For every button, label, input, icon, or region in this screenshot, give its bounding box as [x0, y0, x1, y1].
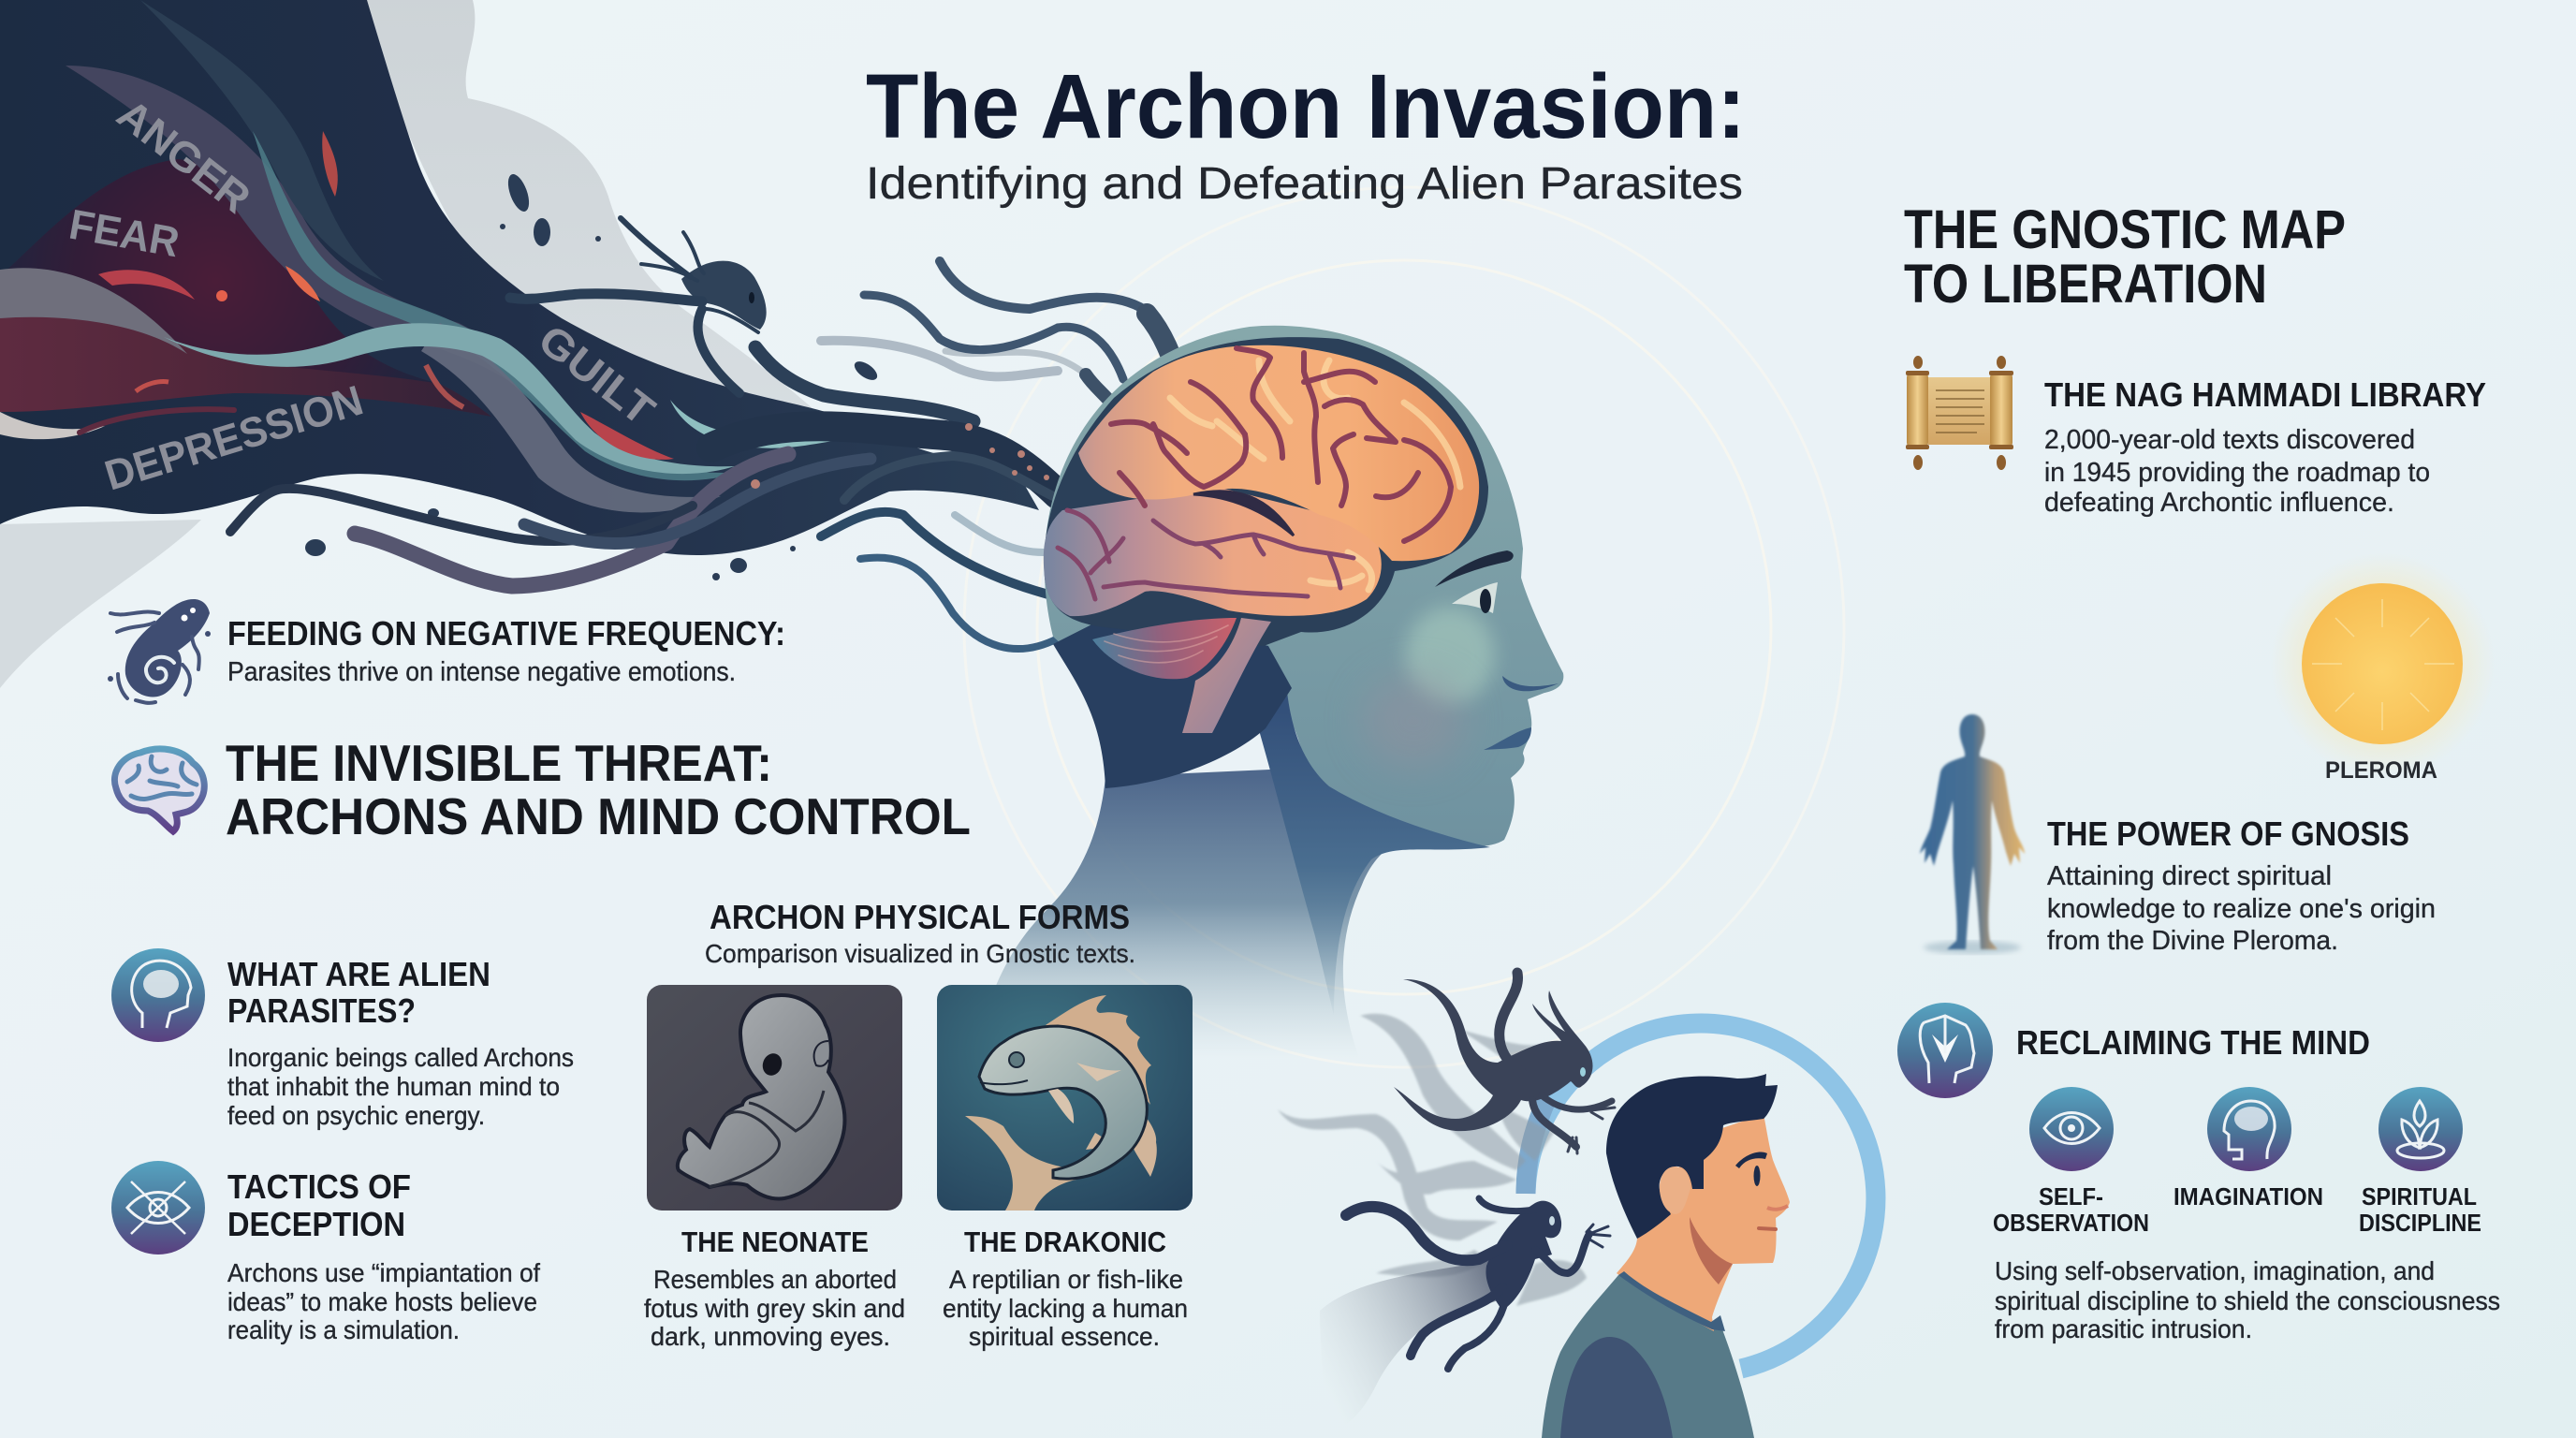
- slate band through anger: [66, 66, 538, 403]
- icon: feeding creature: [108, 599, 211, 703]
- jaw and neck shadow: [1259, 669, 1490, 1016]
- cheek tint: [1405, 607, 1495, 704]
- icon: head with arrow: [1897, 1003, 1993, 1098]
- item: self-observation: [1993, 1087, 2149, 1237]
- block: what are alien parasites: feed on psychic energy.: [227, 1101, 485, 1130]
- block: tactics of deception: ideas” to make hosts believe: [227, 1287, 537, 1316]
- label: the drakonic: entity lacking a human: [943, 1294, 1188, 1323]
- block: tactics of deception: reality is a simulation.: [227, 1315, 460, 1344]
- man hair: [1606, 1074, 1778, 1239]
- man sleeve: [1560, 1337, 1673, 1438]
- subtitle: Identifying and Defeating Alien Parasites: [866, 159, 1743, 209]
- brain: [1044, 345, 1479, 733]
- item: imagination: [2174, 1087, 2323, 1211]
- block: the nag hammadi library: [1906, 356, 2486, 518]
- grey veil upper: [360, 0, 842, 440]
- teal ribbon three: [670, 400, 932, 448]
- skull rim: [1044, 337, 1488, 646]
- head silhouette: [1045, 326, 1563, 846]
- emotion label: depression: DEPRESSION: [99, 375, 368, 500]
- illustration: head profile with brain: [973, 326, 1563, 1077]
- pale sliver: [0, 412, 105, 439]
- heading: the invisible threat: THE INVISIBLE THREAT:: [226, 734, 772, 792]
- subheading: Comparison visualized in Gnostic texts.: [705, 939, 1135, 968]
- ring lower-left fade: [1526, 1100, 1546, 1194]
- man facial features: [1735, 1152, 1788, 1229]
- lower archon: [1346, 1198, 1610, 1369]
- label: the neonate: dark, unmoving eyes.: [651, 1322, 890, 1351]
- item: self-observation: SELF-: [2039, 1182, 2103, 1211]
- item: self-observation: OBSERVATION: [1993, 1209, 2149, 1237]
- man collar: [1618, 1271, 1725, 1331]
- upper archon: [1394, 973, 1615, 1153]
- card: neonate image: [647, 985, 902, 1211]
- heading: the gnostic map to liberation: TO LIBERATION: [1904, 254, 2267, 315]
- icon: pleroma sun: [2270, 551, 2495, 784]
- panel: archon physical forms: [644, 898, 1193, 1351]
- eyebrow: [1435, 550, 1514, 587]
- description: Attaining direct spiritual: [2047, 861, 2332, 891]
- heading: THE NAG HAMMADI LIBRARY: [2044, 375, 2486, 414]
- block: what are alien parasites: [111, 948, 574, 1130]
- title: [866, 55, 1746, 209]
- item: spiritual discipline: [2359, 1087, 2481, 1237]
- heading: the invisible threat: ARCHONS AND MIND CONTROL: [226, 787, 971, 845]
- label: the neonate: [644, 1225, 905, 1351]
- description: 2,000-year-old texts discovered: [2044, 425, 2415, 455]
- heading: RECLAIMING THE MIND: [2016, 1023, 2370, 1062]
- label: pleroma: PLEROMA: [2325, 757, 2437, 784]
- icon: scroll: [1906, 356, 2013, 470]
- temporal sulci: [1058, 510, 1354, 599]
- label: the drakonic: [943, 1225, 1188, 1351]
- block: reclaiming the mind: spiritual discipline to shield the consciousness: [1995, 1286, 2500, 1315]
- block: the nag hammadi library: defeating Archontic influence.: [2044, 488, 2394, 518]
- item: spiritual discipline: SPIRITUAL: [2362, 1182, 2477, 1211]
- main dark body: [0, 0, 1039, 555]
- block: what are alien parasites: that inhabit the human mind to: [227, 1072, 560, 1101]
- maroon core: [0, 159, 440, 384]
- icon: crossed eye: [111, 1161, 205, 1255]
- block: what are alien parasites: PARASITES?: [227, 991, 416, 1030]
- emotion label: guilt: GUILT: [530, 315, 664, 434]
- neck and shoulders: [973, 768, 1404, 1077]
- lips: [1484, 727, 1531, 750]
- brain highlights: [1170, 360, 1460, 590]
- ink blobs: [305, 171, 880, 580]
- grey wisps: [1278, 1014, 1587, 1306]
- label: the drakonic: spiritual essence.: [969, 1322, 1160, 1351]
- heading: the invisible threat: [226, 734, 971, 845]
- teal ribbon two: [164, 323, 735, 474]
- mass creature: [510, 218, 767, 393]
- man ear: [1660, 1167, 1690, 1214]
- heading: the gnostic map to liberation: THE GNOSTIC MAP: [1904, 199, 2346, 260]
- tendrils to the brain: [230, 261, 1292, 649]
- block: the power of gnosis: [1920, 714, 2436, 956]
- text: feeding on negative frequency: [227, 614, 785, 687]
- description: Inorganic beings called Archons: [227, 1043, 574, 1072]
- block: reclaiming the mind: [1897, 1003, 2500, 1343]
- heading: THE POWER OF GNOSIS: [2047, 814, 2409, 853]
- thin maroon streak: [80, 409, 234, 433]
- brain sulci: [1111, 348, 1451, 541]
- label: the neonate: fotus with grey skin and: [644, 1294, 905, 1323]
- description: Using self-observation, imagination, and: [1995, 1256, 2435, 1285]
- heading: ARCHON PHYSICAL FORMS: [710, 898, 1130, 936]
- grey veil lower left: [0, 520, 201, 688]
- heading: the gnostic map to liberation: [1904, 199, 2346, 315]
- label: the neonate: THE NEONATE: [681, 1225, 869, 1258]
- nostril: [1502, 676, 1559, 691]
- description: Parasites thrive on intense negative emotions.: [227, 657, 736, 687]
- emotion label: anger: ANGER: [109, 90, 259, 222]
- lower maroon band: [0, 313, 491, 417]
- nape: [1053, 609, 1292, 788]
- label: the drakonic: A reptilian or fish-like: [949, 1265, 1183, 1294]
- brainstem: [1182, 618, 1271, 733]
- block: the power of gnosis: from the Divine Pleroma.: [2047, 926, 2338, 956]
- red glows: [98, 131, 674, 460]
- item: spiritual discipline: DISCIPLINE: [2359, 1209, 2481, 1237]
- label: the drakonic: THE DRAKONIC: [964, 1225, 1166, 1258]
- cheek mauve: [1362, 674, 1465, 768]
- icon: head with brain: [111, 948, 205, 1042]
- emotion label: fear: FEAR: [66, 200, 183, 266]
- temporal lobe: [1044, 487, 1382, 616]
- cerebrum: [1078, 345, 1479, 561]
- heading: FEEDING ON NEGATIVE FREQUENCY:: [227, 614, 785, 653]
- jaw shadow: [1690, 1217, 1733, 1284]
- block: tactics of deception: DECEPTION: [227, 1205, 405, 1243]
- heading: WHAT ARE ALIEN: [227, 955, 490, 993]
- icon: brain: [114, 749, 204, 831]
- block: tactics of deception: [111, 1161, 540, 1344]
- illustration: dark parasitic emotion mass: [0, 0, 1292, 688]
- grey-mauve ribbon: [421, 323, 721, 512]
- heading: TACTICS OF: [227, 1167, 411, 1206]
- card: drakonic image: [937, 985, 1193, 1211]
- protective ring: [1526, 1023, 1876, 1369]
- man neck and face: [1617, 1114, 1790, 1331]
- block: the nag hammadi library: in 1945 providing the roadmap to: [2044, 458, 2430, 488]
- illustration: man with protective ring and archons: [1278, 973, 1876, 1438]
- grey left band: [0, 268, 187, 354]
- dark smudge: [1310, 1259, 1524, 1438]
- label: the neonate: Resembles an aborted: [653, 1265, 897, 1294]
- slate band top left: [140, 0, 384, 281]
- man shirt: [1542, 1275, 1754, 1438]
- main title: The Archon Invasion:: [866, 55, 1746, 157]
- icon: human figure: [1920, 714, 2025, 954]
- block: reclaiming the mind: from parasitic intrusion.: [1995, 1314, 2252, 1343]
- central fissure: [1193, 492, 1294, 536]
- block: the power of gnosis: knowledge to realize one's origin: [2047, 894, 2436, 924]
- teal ribbon one: [253, 131, 739, 480]
- item: imagination: IMAGINATION: [2174, 1182, 2323, 1211]
- cerebellum: [1092, 618, 1237, 679]
- eye: [1452, 582, 1498, 613]
- description: Archons use “impiantation of: [227, 1258, 540, 1287]
